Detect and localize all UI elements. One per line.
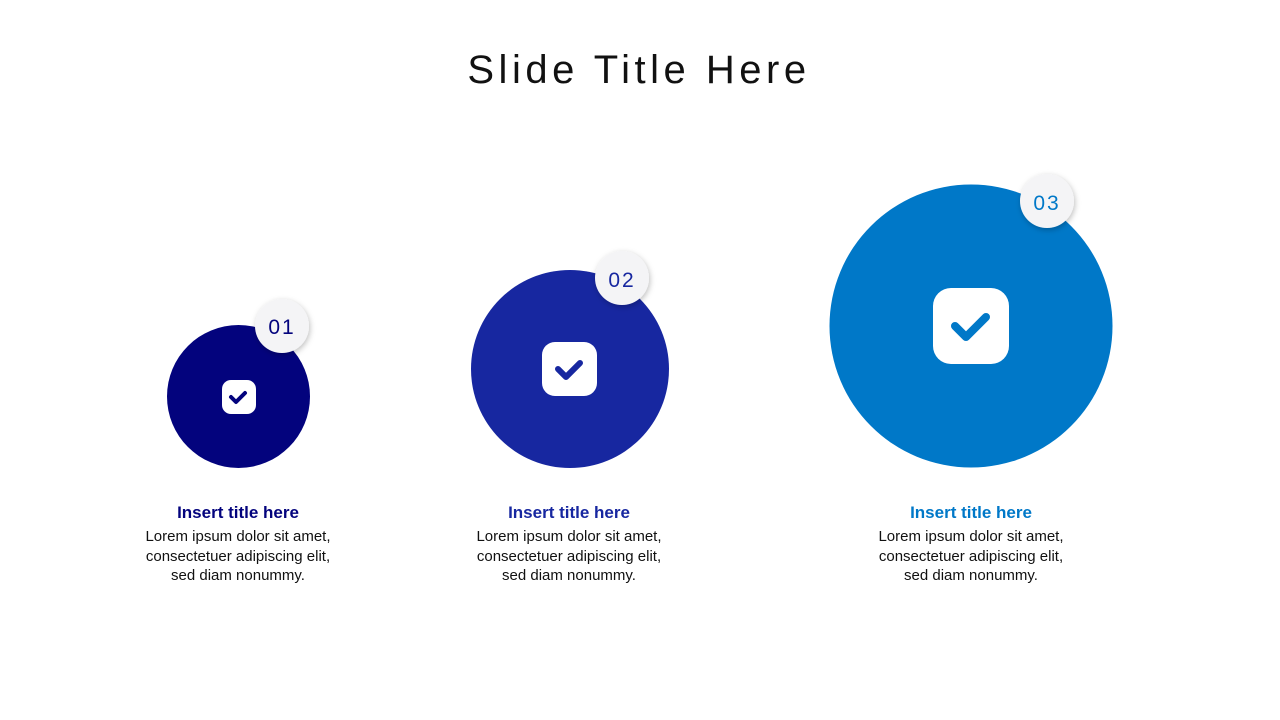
text block 3: Insert title here (910, 503, 1032, 522)
icon: check 1 (222, 380, 256, 414)
text block 3: consectetuer adipiscing elit, (879, 548, 1063, 564)
text block 1: consectetuer adipiscing elit, (146, 548, 330, 564)
text block 1: Lorem ipsum dolor sit amet, (145, 528, 331, 545)
icon: check 3 (933, 288, 1009, 364)
badge 03 (1020, 174, 1074, 228)
text block 3: Lorem ipsum dolor sit amet, (878, 528, 1064, 545)
circle 1 (167, 325, 310, 468)
text block 1: Insert title here (177, 503, 299, 522)
badge 02 (595, 251, 649, 305)
text block 3: sed diam nonummy. (904, 567, 1038, 584)
text block 1: sed diam nonummy. (171, 567, 305, 584)
text block 2: Lorem ipsum dolor sit amet, (476, 528, 662, 545)
circle 2 (471, 270, 669, 468)
title: Slide Title Here (467, 48, 811, 92)
badge 03: 03 (1033, 192, 1061, 215)
icon: check 2 (542, 342, 597, 396)
text block 1 (145, 503, 331, 584)
text block 2: sed diam nonummy. (502, 567, 636, 584)
text block 3 (878, 503, 1064, 584)
text block 2 (476, 503, 662, 584)
circle 3 (830, 184, 1112, 468)
text block 2: consectetuer adipiscing elit, (477, 548, 661, 564)
badge 02: 02 (608, 269, 636, 292)
badge 01: 01 (268, 316, 296, 339)
badge 01 (255, 299, 309, 353)
text block 2: Insert title here (508, 503, 630, 522)
